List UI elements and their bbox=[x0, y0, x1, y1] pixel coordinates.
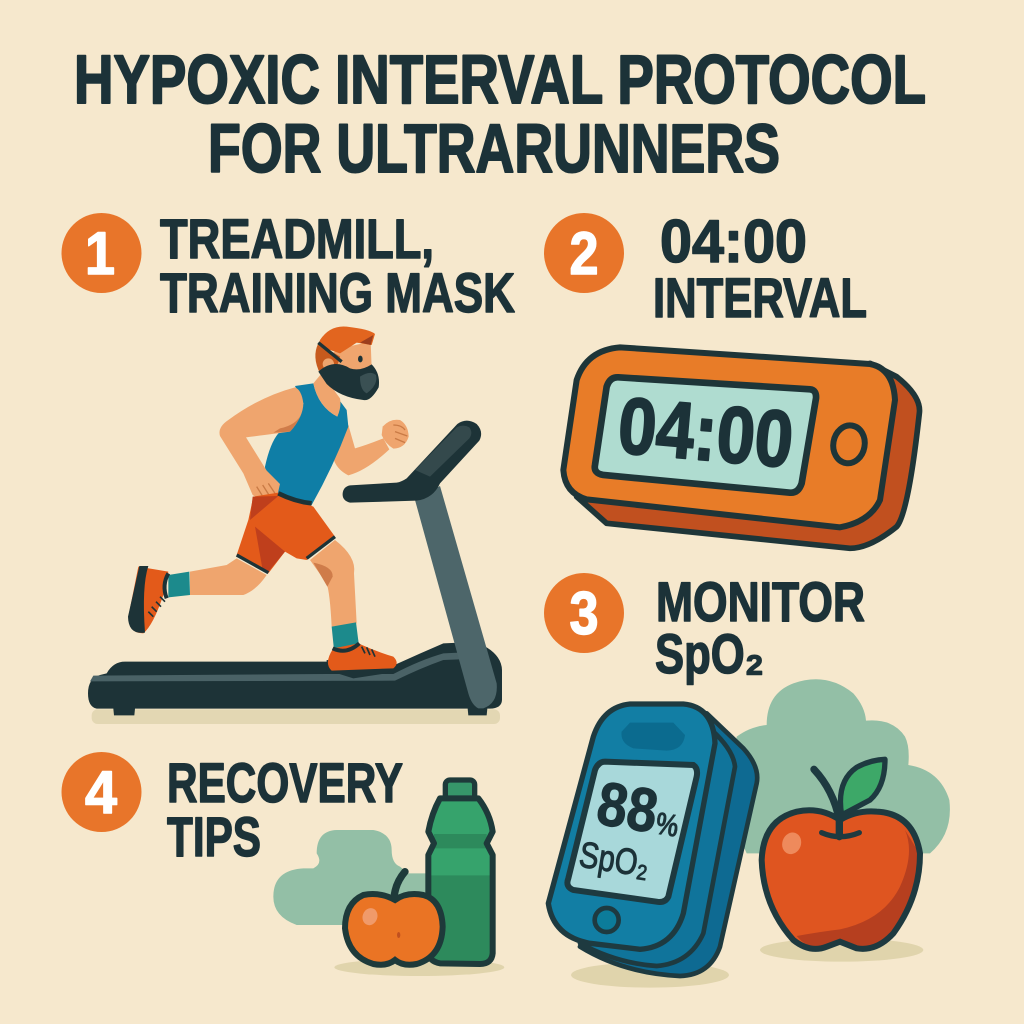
illustration: recovery items bbox=[273, 780, 504, 976]
tank top bbox=[265, 383, 348, 505]
fist bbox=[382, 420, 409, 449]
treadmill post and handle bbox=[343, 421, 497, 708]
illustration: pulse oximeter and apple bbox=[548, 679, 950, 988]
step 1 badge bbox=[62, 213, 142, 293]
oximeter slot bbox=[621, 723, 685, 751]
timer screen bbox=[595, 377, 816, 493]
timer body side bbox=[577, 363, 920, 548]
step 2 heading: INTERVAL bbox=[653, 266, 867, 329]
front arm bbox=[219, 387, 303, 499]
rear leg bbox=[190, 558, 267, 595]
step 3 badge bbox=[544, 573, 624, 653]
step 4 heading: RECOVERY bbox=[167, 751, 403, 814]
step 3 heading: MONITOR bbox=[656, 570, 865, 633]
step 2 badge bbox=[544, 213, 624, 293]
orange fruit bbox=[345, 872, 443, 965]
front leg bbox=[310, 540, 357, 627]
step 2 heading bbox=[653, 208, 867, 329]
bush bbox=[273, 830, 430, 925]
oximeter button bbox=[595, 908, 619, 932]
step 1 heading bbox=[160, 207, 515, 324]
oximeter reading: % bbox=[653, 805, 681, 844]
step 3 badge: 3 bbox=[570, 580, 598, 647]
treadmill base bbox=[88, 643, 502, 715]
step 4 badge bbox=[62, 752, 142, 832]
step 4 heading: TIPS bbox=[167, 805, 261, 868]
treadmill floor shadow bbox=[92, 709, 500, 724]
apple shadow bbox=[760, 938, 923, 962]
illustration: runner on treadmill bbox=[88, 326, 502, 724]
rear shoe bbox=[128, 566, 168, 633]
neck bbox=[313, 373, 340, 417]
oximeter reading: 88 bbox=[592, 769, 662, 847]
arm shadow and knuckles bbox=[257, 413, 302, 497]
red apple bbox=[762, 759, 920, 949]
step 3 heading bbox=[655, 570, 865, 685]
step 2 heading: 04:00 bbox=[660, 208, 807, 275]
shorts bbox=[237, 493, 335, 573]
step 3 heading: SpO₂ bbox=[655, 622, 764, 685]
step 4 heading bbox=[167, 751, 403, 868]
ground shadow bbox=[334, 959, 504, 976]
green bush bbox=[733, 679, 950, 853]
water bottle bbox=[428, 780, 493, 964]
timer button bbox=[830, 423, 868, 466]
step 2 badge: 2 bbox=[570, 220, 598, 287]
step 1 heading: TRAINING MASK bbox=[160, 261, 515, 324]
oximeter reading: SpO₂ bbox=[576, 834, 652, 885]
oximeter shadow bbox=[571, 962, 729, 988]
oximeter reading bbox=[576, 768, 686, 889]
step 1 heading: TREADMILL, bbox=[160, 207, 434, 270]
oximeter screen bbox=[567, 762, 697, 902]
oximeter front bbox=[548, 704, 715, 949]
step 1 badge: 1 bbox=[85, 220, 115, 287]
front shoe bbox=[328, 643, 397, 671]
front sock bbox=[332, 622, 359, 650]
rear arm bbox=[334, 425, 389, 475]
oximeter middle shell bbox=[580, 730, 735, 966]
title: FOR ULTRARUNNERS bbox=[208, 110, 780, 187]
oximeter rear shell bbox=[580, 713, 757, 976]
illustration: digital timer showing 04:00 bbox=[563, 347, 920, 548]
timer face bbox=[563, 347, 895, 527]
title bbox=[74, 41, 926, 187]
rear sock bbox=[168, 572, 190, 597]
step 4 badge: 4 bbox=[85, 759, 118, 826]
head with training mask bbox=[315, 326, 379, 400]
timer readout: 04:00 bbox=[615, 381, 797, 484]
